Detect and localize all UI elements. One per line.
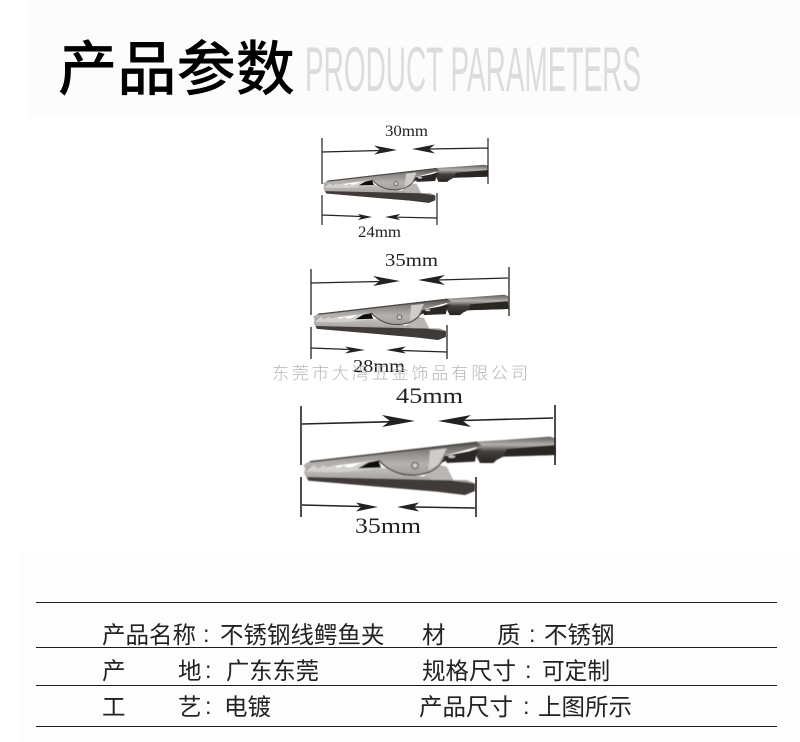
row 3: process and product size: 工 — [102, 694, 126, 720]
row 2: origin and size spec — [102, 657, 610, 684]
row 1: product name and material: 不锈钢线鳄鱼夹 — [220, 622, 384, 648]
bottom table background — [20, 552, 800, 742]
row 1: product name and material: 产品名称 — [102, 622, 196, 648]
row 2: origin and size spec: : — [525, 657, 532, 683]
diagram: 30mm alligator clip — [322, 123, 488, 241]
row 2: origin and size spec: 可定制 — [542, 658, 610, 684]
label 30mm: 30mm — [385, 123, 428, 140]
header band — [28, 0, 800, 117]
row 2: origin and size spec: 地 — [178, 658, 202, 684]
row 1: product name and material: 材 — [422, 622, 446, 648]
row 1: product name and material: 质 — [497, 622, 520, 648]
row 2: origin and size spec: 产 — [102, 658, 126, 684]
title: 产品参数: 产品参数 — [58, 36, 295, 103]
label 35mm lower: 35mm — [355, 513, 422, 538]
row 2: origin and size spec: : — [205, 657, 212, 683]
label 24mm: 24mm — [358, 224, 401, 241]
row 2: origin and size spec: 规格尺寸 — [422, 658, 516, 684]
row 3: process and product size: 上图所示 — [538, 694, 632, 720]
dimension lines large — [301, 405, 555, 517]
row 3: process and product size: 产品尺寸 — [419, 694, 513, 720]
row 1: product name and material: : — [529, 621, 536, 647]
row 1: product name and material: : — [203, 621, 210, 647]
label 35mm: 35mm — [385, 250, 438, 270]
dimension lines small — [322, 138, 488, 225]
watermark: 东莞市大湾五金饰品有限公司 — [272, 364, 528, 383]
clip image large — [303, 437, 556, 495]
row 3: process and product size: : — [205, 693, 212, 719]
parameter table — [36, 602, 777, 726]
row 1: product name and material: 不锈钢 — [544, 622, 614, 648]
clip image small — [323, 165, 488, 203]
label 28mm: 28mm — [353, 356, 405, 376]
row 3: process and product size: 电镀 — [224, 694, 271, 720]
row 3: process and product size — [102, 693, 632, 720]
dimension lines medium — [311, 267, 509, 359]
row 3: process and product size: 艺 — [178, 694, 202, 720]
row 3: process and product size: : — [523, 693, 530, 719]
diagram: 35mm alligator clip — [311, 250, 509, 376]
label 45mm: 45mm — [396, 383, 464, 408]
clip image medium — [313, 295, 508, 340]
row 2: origin and size spec: 广东东莞 — [226, 658, 319, 684]
row 1: product name and material — [102, 621, 614, 648]
diagram: 45mm alligator clip — [301, 383, 556, 538]
